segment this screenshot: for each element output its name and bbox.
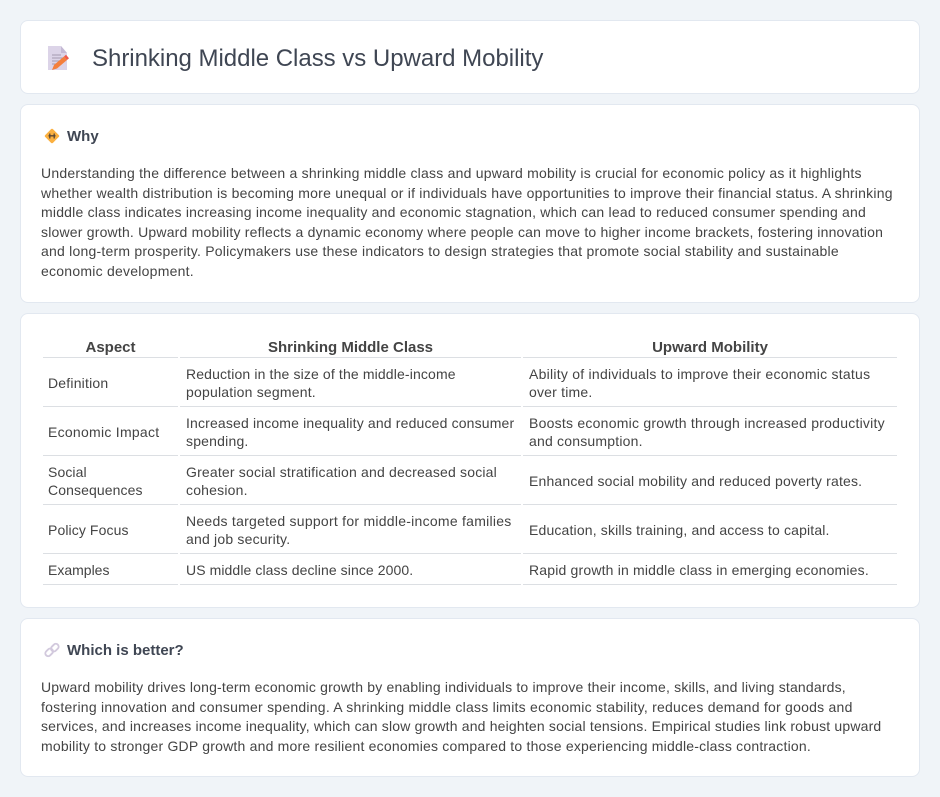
text block: why explanation: Understanding the difference between a shrinking middle class and upward mobility is crucial for economic policy as it highlights: [41, 165, 862, 181]
text block: why explanation: whether wealth distribution is becoming more unequal or if individuals have opportunities to improve their financial status. A shrinking: [41, 185, 893, 201]
comparison table: Social: [48, 464, 87, 480]
comparison table: Examples: [48, 562, 109, 578]
comparison table: Consequences: [48, 482, 143, 498]
text block: verdict: mobility to stronger GDP growth and more resilient economies compared to those experiencing middle-class contraction.: [41, 738, 811, 754]
heading: which is better: Which is better?: [67, 642, 184, 659]
comparison table: Reduction in the size of the middle-income: [186, 366, 456, 382]
comparison table: cohesion.: [186, 482, 248, 498]
text block: why explanation: and long-term prosperity. Policymakers use these indicators to design strategies that promote social stability and sustainable: [41, 243, 839, 259]
comparison table: Ability of individuals to improve their economic status: [529, 366, 870, 382]
icon: memo with pencil: [48, 46, 69, 70]
comparison table: spending.: [186, 433, 249, 449]
text block: why explanation: middle class indicates increasing income inequality and economic stagnation, which can lead to reduced consumer spending and: [41, 204, 866, 220]
comparison table: Economic Impact: [48, 424, 159, 440]
comparison table: Education, skills training, and access to capital.: [529, 522, 830, 538]
text block: verdict: [41, 679, 881, 754]
comparison table: and consumption.: [529, 433, 643, 449]
text block: verdict: Upward mobility drives long-term economic growth by enabling individuals to improve their income, skills, and living standards,: [41, 679, 846, 695]
comparison table: US middle class decline since 2000.: [186, 562, 413, 578]
panel: why: [20, 104, 920, 303]
text block: verdict: fostering innovation and consumer spending. A shrinking middle class limits economic stability, reduces demand for goods and: [41, 699, 853, 715]
text block: why explanation: [41, 165, 893, 279]
comparison table: Rapid growth in middle class in emerging economies.: [529, 562, 869, 578]
comparison table: [43, 338, 897, 585]
text block: verdict: services, and increases income inequality, which can slow growth and heighten social tensions. Empirical studies link robust upward: [41, 718, 881, 734]
icon: diamond road sign: [44, 128, 60, 144]
text block: why explanation: economic development.: [41, 263, 194, 279]
icon: chain link: [44, 642, 60, 658]
comparison table: Boosts economic growth through increased productivity: [529, 415, 885, 431]
comparison table: Definition: [48, 375, 108, 391]
comparison table: Upward Mobility: [652, 338, 768, 356]
comparison table: Needs targeted support for middle-income families: [186, 513, 512, 529]
panel: title card: [20, 20, 920, 94]
comparison table: Policy Focus: [48, 522, 129, 538]
panel: comparison table: [20, 313, 920, 608]
comparison table: Enhanced social mobility and reduced poverty rates.: [529, 473, 862, 489]
comparison table: and job security.: [186, 531, 290, 547]
comparison table: Greater social stratification and decreased social: [186, 464, 497, 480]
heading: why: Why: [67, 128, 99, 145]
comparison table: Increased income inequality and reduced consumer: [186, 415, 514, 431]
panel: which is better: [20, 618, 920, 777]
comparison table: population segment.: [186, 384, 316, 400]
text block: why explanation: slower growth. Upward mobility reflects a dynamic economy where people can move to higher income brackets, fostering innovation: [41, 224, 883, 240]
comparison table: Shrinking Middle Class: [268, 338, 433, 356]
title: Shrinking Middle Class vs Upward Mobility: [92, 45, 543, 72]
comparison table: over time.: [529, 384, 592, 400]
comparison table: Aspect: [85, 338, 136, 356]
